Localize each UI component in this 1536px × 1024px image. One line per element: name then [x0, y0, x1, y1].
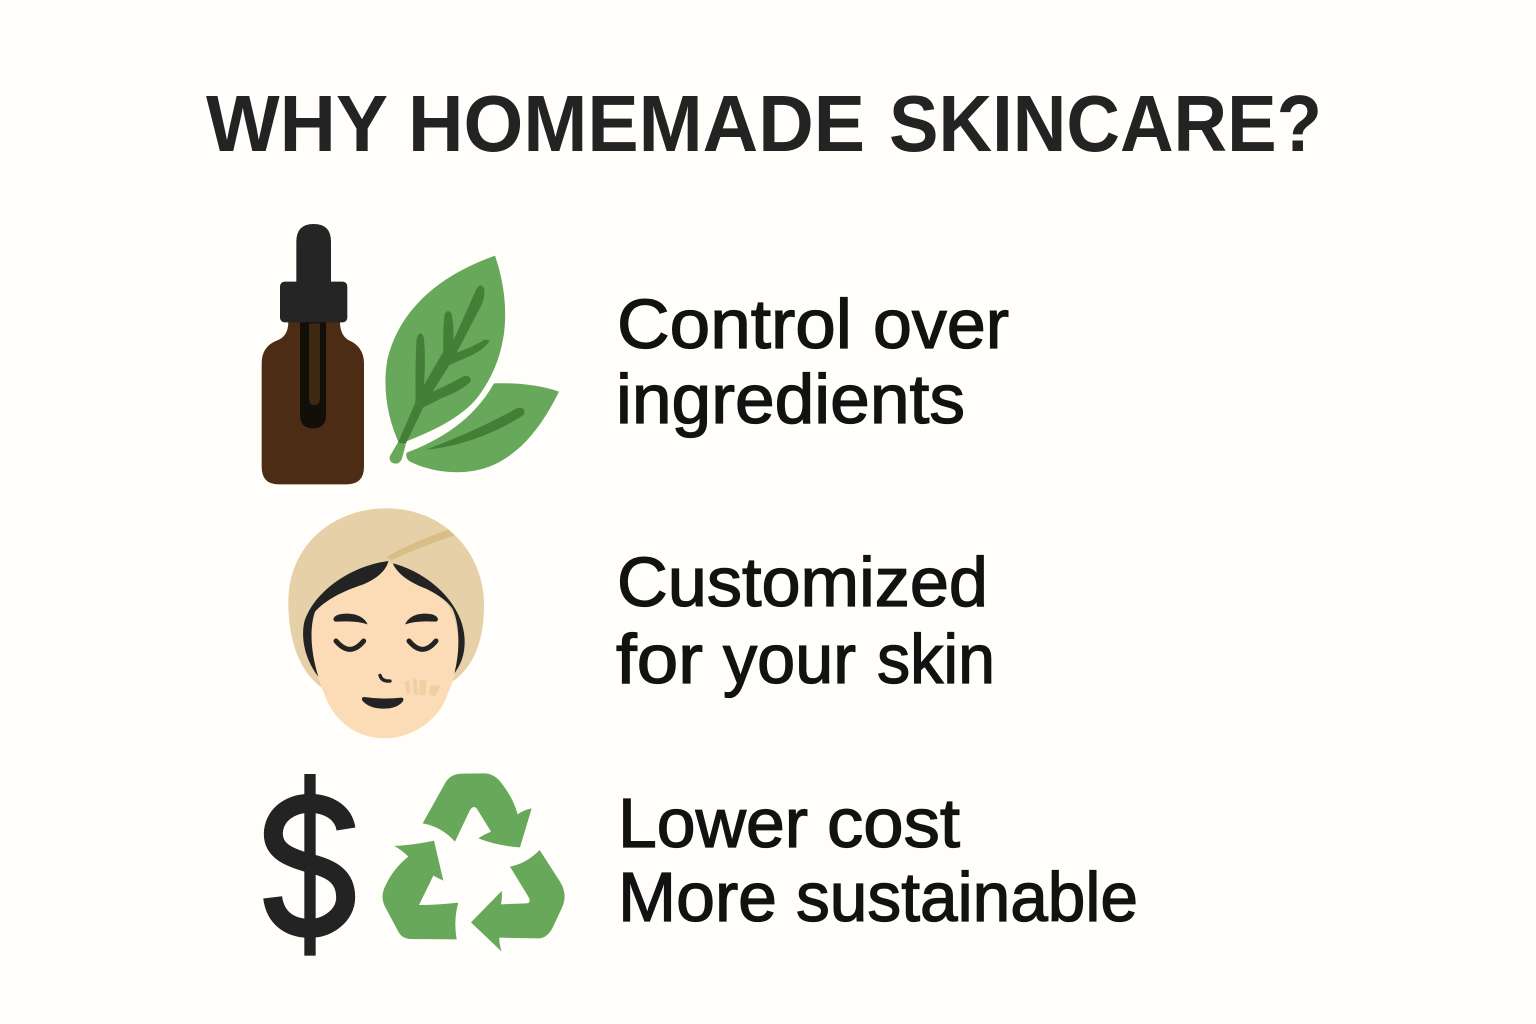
closed eyes	[336, 641, 436, 649]
text: customized for your skin: your	[723, 620, 856, 698]
text: customized for your skin: Customized	[617, 543, 988, 621]
small leaf	[406, 383, 559, 472]
eyebrows	[333, 614, 438, 624]
large leaf veins	[398, 285, 490, 444]
wrap fold	[387, 530, 454, 560]
icon: recycling arrows	[382, 773, 565, 952]
skin patch	[404, 678, 441, 697]
icon: green leaves	[385, 256, 559, 472]
face	[311, 562, 459, 738]
text: lower cost more sustainable	[618, 784, 1138, 936]
head wrap	[288, 508, 484, 688]
large leaf	[385, 256, 505, 444]
small leaf vein	[427, 408, 524, 449]
hair left	[303, 561, 388, 677]
dropper inner liquid	[309, 323, 320, 405]
text: lower cost more sustainable: More	[618, 858, 777, 936]
dropper bulb	[296, 224, 331, 285]
right arrow	[471, 850, 565, 952]
text: customized for your skin: for	[616, 620, 703, 698]
text: control over ingredients: over	[873, 285, 1009, 363]
text: lower cost more sustainable: sustainable	[796, 858, 1138, 936]
title: SKINCARE?	[889, 79, 1322, 168]
dropper tube	[300, 322, 326, 428]
title	[206, 79, 1322, 168]
text: customized for your skin: skin	[877, 620, 995, 698]
text: lower cost more sustainable: Lower	[618, 784, 808, 862]
title: HOMEMADE	[408, 79, 865, 168]
text: control over ingredients	[616, 285, 1009, 438]
icon: dollar sign	[273, 774, 346, 956]
text: control over ingredients: Control	[617, 285, 852, 363]
nose	[380, 675, 390, 681]
dropper collar	[280, 282, 347, 322]
bottle body	[262, 322, 364, 484]
text: customized for your skin	[616, 543, 995, 698]
icon: dropper bottle	[262, 224, 364, 484]
hair right	[393, 563, 465, 673]
mouth	[362, 697, 403, 709]
text: lower cost more sustainable: cost	[827, 784, 960, 862]
top arrow	[423, 773, 532, 847]
icon: face with head wrap	[288, 508, 484, 738]
title: WHY	[206, 79, 388, 168]
left arrow	[382, 841, 458, 939]
leaf stem	[390, 440, 406, 464]
text: control over ingredients: ingredients	[616, 360, 965, 438]
